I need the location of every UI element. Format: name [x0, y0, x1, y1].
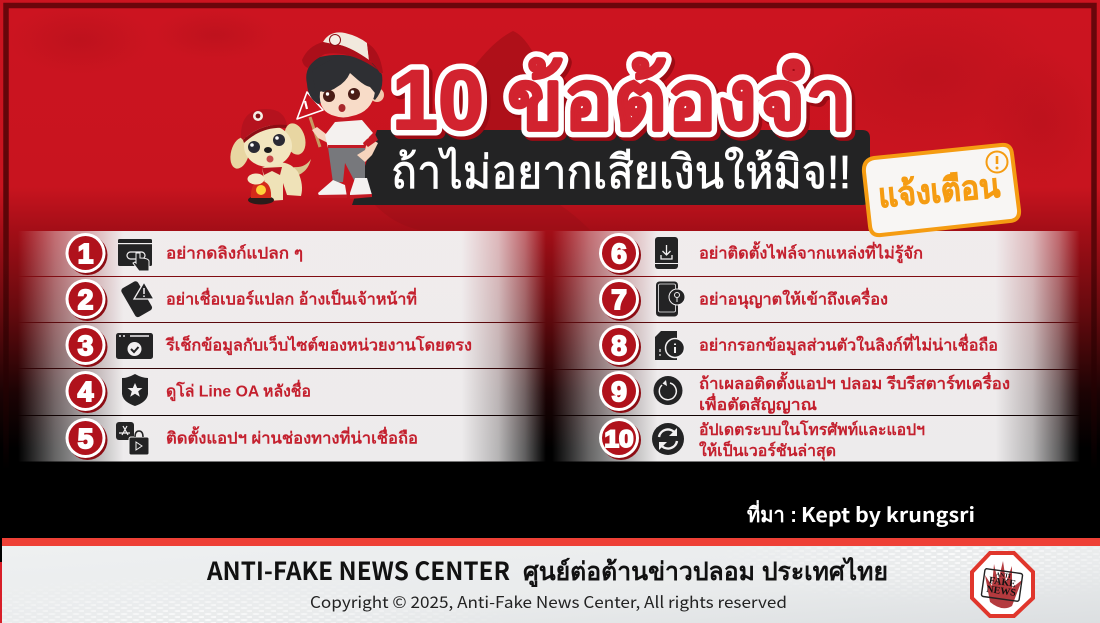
- dog collar: [262, 167, 282, 175]
- icon: shield star: [122, 374, 148, 406]
- cap: [323, 32, 369, 60]
- icon: restart: [654, 376, 682, 405]
- hair back: [306, 55, 382, 104]
- item 3: [18, 323, 546, 368]
- warning sign: [297, 92, 323, 119]
- panel: left list: [18, 231, 546, 462]
- icon: phone key: [656, 282, 685, 316]
- logo: anti fake news: ANTI: [995, 572, 1012, 580]
- item 2: อย่าเชื่อเบอร์แปลก อ้างเป็นเจ้าหน้าที่: [166, 288, 417, 308]
- pants: [328, 147, 365, 183]
- panel: right list: [552, 231, 1080, 462]
- item 1: อย่ากดลิงก์แปลก ๆ: [166, 244, 303, 262]
- icon: file info: [655, 331, 684, 360]
- item 2: 2: [78, 284, 93, 315]
- illustration: dog mascot: [227, 109, 311, 204]
- hair fringe: [312, 55, 382, 95]
- item 9 text line 2: เพื่อตัดสัญญาณ: [699, 393, 817, 415]
- badge exclamation icon: [986, 152, 1008, 172]
- icon: phone warning: [120, 280, 154, 318]
- icon: update: [652, 423, 684, 455]
- footer heading: [206, 552, 888, 588]
- footer: [0, 538, 1100, 623]
- footer heading: ศูนย์ต่อต้านข่าวปลอม ประเทศไทย: [523, 556, 888, 588]
- footer red stripe: [2, 538, 1100, 546]
- icon: app stores: [116, 422, 149, 455]
- item 8: อย่ากรอกข้อมูลส่วนตัวในลิงก์ที่ไม่น่าเชื่อถือ: [699, 334, 998, 356]
- source credit: Kept by krungsri: [801, 499, 975, 528]
- item 10: [552, 416, 1080, 462]
- item 10 text: อัปเดตระบบในโทรศัพท์และแอปฯ: [699, 419, 925, 439]
- dark texture patches and swoosh behind title: [10, 0, 1100, 230]
- dog body: [262, 162, 302, 201]
- logo: anti fake news: NEWS: [986, 584, 1017, 599]
- item 8: 8: [611, 330, 627, 361]
- logo: anti fake news: FAKE: [988, 575, 1017, 590]
- item 8: [552, 323, 1080, 369]
- item 7: 7: [611, 284, 627, 315]
- arms: [312, 127, 328, 143]
- logo: anti fake news: [972, 553, 1033, 616]
- footer heading: ANTI-FAKE NEWS CENTER: [206, 552, 510, 588]
- ear: [370, 88, 384, 102]
- eyes and mouth: [323, 90, 335, 102]
- source credit: ที่มา :: [747, 499, 797, 527]
- item 10 text line 2: ให้เป็นเวอร์ชันล่าสุด: [699, 439, 836, 461]
- dog paw: [248, 174, 264, 184]
- item 9: 9: [611, 376, 627, 407]
- title: 10 ข้อต้องจำ: [392, 53, 852, 147]
- dog eyes: [248, 141, 260, 153]
- dog ears: [227, 135, 253, 171]
- alert badge: [864, 145, 1019, 235]
- badge label: แจ้งเตือน: [877, 167, 1002, 214]
- illustration: boy mascot with warning sign: [297, 32, 384, 199]
- warning sign stick: [310, 117, 320, 147]
- item 5: ติดตั้งแอปฯ ผ่านช่องทางที่น่าเชื่อถือ: [166, 426, 418, 448]
- item 4: [18, 369, 546, 415]
- title: 10 ข้อต้องจำ: [395, 56, 855, 150]
- shoes: [318, 180, 347, 198]
- dog tail: [294, 159, 311, 176]
- shirt: [325, 120, 373, 148]
- item 5: 5: [78, 423, 93, 454]
- item 9: [552, 370, 1080, 415]
- dog nose and mouth: [264, 147, 272, 153]
- item 3: 3: [78, 330, 93, 361]
- icon: browser check: [116, 333, 153, 359]
- subtitle bar: [352, 130, 870, 205]
- item 9 text: ถ้าเผลอติดตั้งแอปฯ ปลอม รีบรีสตาร์ทเครื่อง: [699, 371, 1010, 393]
- dog cap: [241, 109, 287, 140]
- item 7: อย่าอนุญาตให้เข้าถึงเครื่อง: [699, 288, 888, 310]
- item 4: ดูโล่ Line OA หลังชื่อ: [166, 380, 311, 402]
- item 5: [18, 416, 546, 462]
- subtitle text: ถ้าไม่อยากเสียเงินให้มิจ!!: [391, 146, 851, 198]
- siren: [248, 196, 274, 204]
- item 6: [552, 231, 1080, 276]
- item 1: 1: [78, 238, 93, 269]
- item 4: 4: [78, 376, 94, 407]
- icon: phone download: [655, 237, 678, 269]
- face: [320, 73, 375, 118]
- icon: browser click: [118, 239, 152, 271]
- footer copyright: Copyright © 2025, Anti-Fake News Center, All rights reserved: [310, 589, 787, 613]
- item 2: [18, 277, 546, 322]
- item 6: 6: [611, 238, 627, 269]
- item 7: [552, 277, 1080, 322]
- item 1: [18, 231, 546, 276]
- dog head: [244, 125, 292, 167]
- title: 10 ข้อต้องจำ: [392, 53, 852, 147]
- item 10: 10: [604, 426, 634, 453]
- item 6: อย่าติดตั้งไฟล์จากแหล่งที่ไม่รู้จัก: [699, 240, 923, 264]
- item 3: รีเช็กข้อมูลกับเว็บไซต์ของหน่วยงานโดยตรง: [165, 334, 472, 356]
